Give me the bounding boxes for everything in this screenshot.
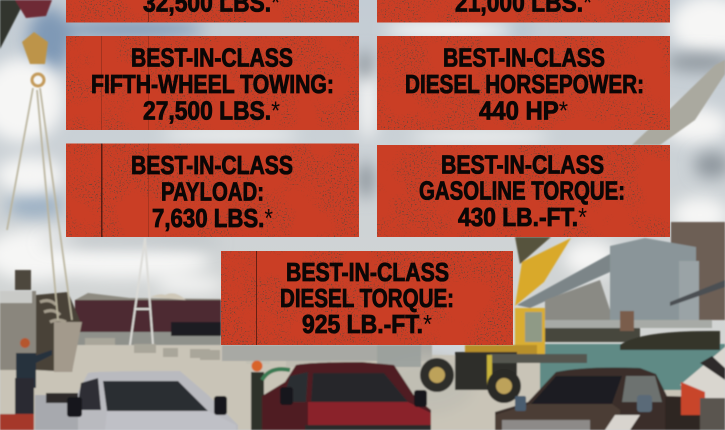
stat text xyxy=(280,259,454,339)
stat text xyxy=(91,44,334,126)
stat text xyxy=(131,152,293,233)
panel: diesel torque xyxy=(221,251,513,345)
scene: dust cloud band xyxy=(222,345,432,361)
stat text: BEST-IN-CLASS xyxy=(131,44,293,72)
scene: left concrete bucket structure xyxy=(0,270,82,372)
scene: water xyxy=(540,344,725,390)
stat text: BEST-IN-CLASS xyxy=(286,259,449,287)
panel: gasoline torque xyxy=(377,145,670,237)
stat text xyxy=(405,44,644,126)
stat text: 27,500 LBS.* xyxy=(143,98,280,126)
stat text xyxy=(419,152,625,232)
stat text: BEST-IN-CLASS xyxy=(443,44,605,72)
stat text: PAYLOAD: xyxy=(161,178,264,206)
panel: top right, cropped stat xyxy=(377,0,670,22)
scene: crane hook and rigging top left xyxy=(0,0,72,320)
stat text: FIFTH-WHEEL TOWING: xyxy=(91,71,334,99)
stat text: DIESEL TORQUE: xyxy=(280,285,454,313)
icon: silver pickup truck xyxy=(0,371,238,430)
stat text: 430 LB.-FT.* xyxy=(458,204,587,232)
panel: fifth-wheel towing xyxy=(66,36,359,130)
scene: ground xyxy=(0,345,725,430)
scene: grey industrial building xyxy=(517,222,725,350)
icon: dark brown pickup truck xyxy=(495,368,700,430)
scene: concrete blocks xyxy=(85,338,331,367)
stat text: GASOLINE TORQUE: xyxy=(419,178,625,206)
stat text: BEST-IN-CLASS xyxy=(441,152,604,180)
panel: top left, cropped stat xyxy=(66,0,359,22)
stat text: 440 HP* xyxy=(479,98,568,126)
panel: payload xyxy=(66,144,359,237)
scene: workers xyxy=(15,338,290,430)
stat text: 925 LB.-FT.* xyxy=(302,311,432,339)
scene: red and white equipment at right edge xyxy=(680,347,725,430)
scene: distant barge and shoreline xyxy=(75,238,221,347)
scene: yellow crane xyxy=(375,237,587,415)
stat text: 7,630 LBS.* xyxy=(152,205,273,233)
panel: diesel horsepower xyxy=(377,36,670,130)
stat text: BEST-IN-CLASS xyxy=(131,152,293,180)
scene: grey boom top right xyxy=(632,60,725,145)
stat text: DIESEL HORSEPOWER: xyxy=(405,71,644,99)
icon: red pickup truck xyxy=(262,362,431,430)
